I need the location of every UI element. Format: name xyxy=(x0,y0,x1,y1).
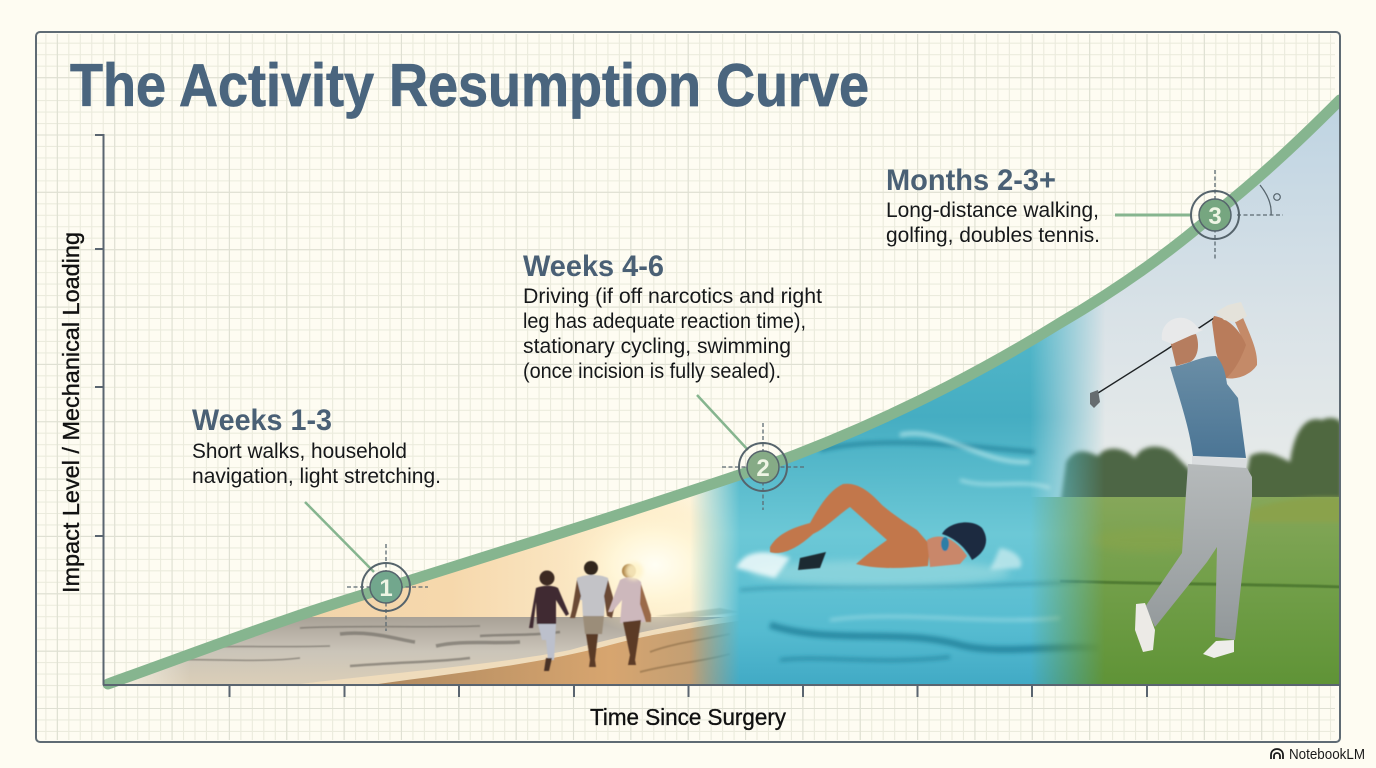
text block: months 2-3+: Months 2-3+ xyxy=(886,164,1056,197)
figure: woman in dark top xyxy=(529,570,569,671)
photo: beach walkers xyxy=(124,488,737,684)
marker 2 with leader xyxy=(697,395,806,510)
y axis xyxy=(95,135,104,685)
title: The Activity Resumption Curve xyxy=(70,52,869,119)
rear arm xyxy=(1226,313,1257,378)
head xyxy=(1170,334,1198,366)
figure: man in grey shirt xyxy=(570,561,615,667)
text block: weeks 4-6: (once incision is fully sealed). xyxy=(523,360,781,383)
figure: swimmer xyxy=(770,484,986,570)
trousers xyxy=(1145,464,1252,640)
belt xyxy=(1192,456,1247,469)
figure: woman in lavender dress xyxy=(608,564,651,665)
figure: golfer xyxy=(1090,302,1257,658)
watermark: NotebookLM: NotebookLM xyxy=(1289,746,1365,763)
cap xyxy=(1162,318,1203,344)
text block: months 2-3+: Long-distance walking, xyxy=(886,199,1099,222)
text block: months 2-3+: golfing, doubles tennis. xyxy=(886,224,1100,247)
text block: months 2-3+ xyxy=(886,164,1100,247)
growth curve xyxy=(108,100,1340,684)
text block: weeks 4-6: Weeks 4-6 xyxy=(523,250,664,283)
photo band: beach, pool and golf course below the curve xyxy=(100,90,1350,690)
marker 1 with leader xyxy=(305,502,428,631)
front arm xyxy=(1212,316,1246,380)
x axis xyxy=(103,685,1340,697)
text block: weeks 4-6: stationary cycling, swimming xyxy=(523,335,791,358)
text block: weeks 1-3: Weeks 1-3 xyxy=(192,404,332,437)
marker 3 with leader and angle xyxy=(1115,170,1283,259)
marker 3 with leader and angle: 3 xyxy=(1208,203,1222,230)
club xyxy=(1098,318,1214,393)
text block: weeks 4-6: leg has adequate reaction time), xyxy=(523,310,806,333)
y axis label: Impact Level / Mechanical Loading xyxy=(58,232,84,593)
text block: weeks 1-3: navigation, light stretching. xyxy=(192,465,441,488)
photo: golf course xyxy=(1033,109,1339,684)
marker 2 with leader: 2 xyxy=(756,455,770,482)
text block: weeks 4-6: Driving (if off narcotics and right xyxy=(523,285,822,308)
torso xyxy=(1170,356,1246,458)
text block: weeks 4-6 xyxy=(523,250,822,383)
shoes xyxy=(1135,603,1155,652)
x axis label: Time Since Surgery xyxy=(590,704,786,730)
marker 1 with leader: 1 xyxy=(379,575,393,602)
text block: weeks 1-3: Short walks, household xyxy=(192,440,407,463)
text block: weeks 1-3 xyxy=(192,404,441,488)
photo: swimmer in pool xyxy=(680,300,1120,690)
